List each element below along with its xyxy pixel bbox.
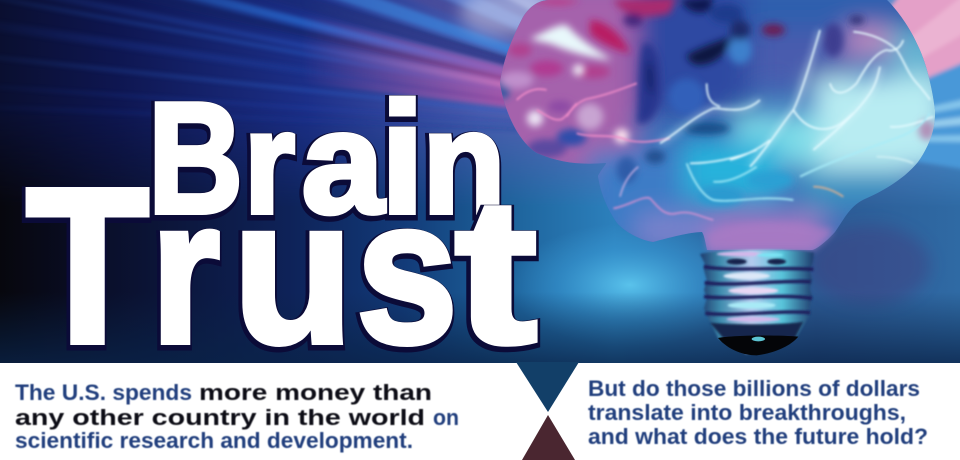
title word: Brain: i [380,73,424,249]
title word: Trust: T [25,144,148,392]
text block: left intro [15,380,459,453]
background: ray burst [0,0,960,365]
text block: left intro: on [433,405,459,430]
title word: Brain: B [148,70,243,246]
text block: right question: and what does the future hold? [588,424,928,449]
text block: left intro: more money than [199,380,432,405]
left lobe folds [530,0,580,4]
illustration: glowing brain light bulb [480,0,947,355]
title word: Brain: r [244,82,295,244]
title word: Trust: r [151,157,220,386]
title word: Trust: s [356,157,458,386]
middle dark folds [637,43,661,124]
hourglass divider: top triangle [516,362,579,412]
title word: Trust: u [232,160,352,388]
text block: left intro: scientific research and development. [15,428,413,453]
title word: Trust: r [150,160,219,388]
title word: Trust: t [454,160,536,388]
brain [480,0,947,257]
title word: Brain: a [301,84,384,246]
title word: Brain: n [422,84,504,246]
panel: white intro strip [0,363,960,460]
text block: right question [588,376,928,449]
veins glow [660,30,880,167]
veins light [660,30,933,201]
title word: Brain: i [380,70,424,246]
text block: left intro: The U.S. spends [15,380,192,405]
title word: Trust: T [26,142,149,389]
screw base [700,223,833,355]
title word: Brain: r [243,84,294,246]
title word: Trust: s [356,160,456,388]
title word: Trust [25,142,537,392]
title word: Brain: n [422,82,506,244]
veins pink [517,83,843,220]
right side rays [780,0,960,170]
title word: Trust: t [455,157,537,386]
text block: left intro: any other country in the world [15,405,425,430]
title word: Brain: B [147,73,242,249]
highlights [527,25,629,143]
title word: Trust: u [233,157,353,386]
title word: Brain [147,70,506,249]
text block: right question: But do those billions of dollars [588,376,920,401]
hourglass divider: bottom triangle [522,415,575,460]
title word: Brain: a [302,82,385,244]
title [25,70,537,392]
text block: right question: translate into breakthroughs, [588,400,906,425]
